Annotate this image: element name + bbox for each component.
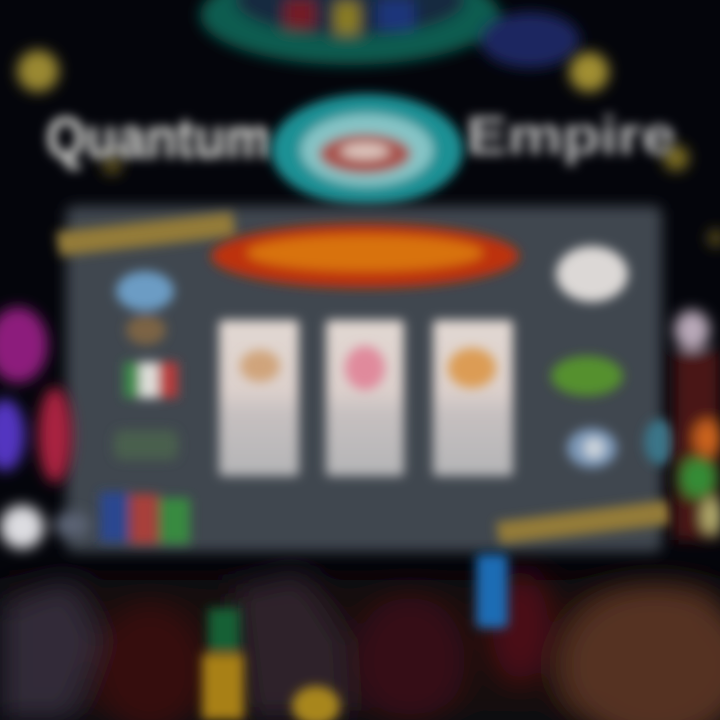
- badge: top right: [556, 246, 628, 302]
- left column icons: [114, 271, 178, 460]
- audience silhouettes at bottom: [0, 570, 720, 720]
- colour bars lower left: [100, 492, 190, 544]
- title: Empire: [466, 106, 676, 166]
- title emblem: [271, 94, 463, 206]
- right neon lights: [674, 310, 720, 540]
- title: Quantum: [46, 106, 271, 171]
- left neon lights: [0, 307, 90, 549]
- bottom coloured markers: [202, 554, 508, 720]
- ribbon: top left: [56, 212, 236, 256]
- title: [46, 106, 676, 171]
- slot machine panel: [56, 206, 676, 552]
- ribbon: bottom right: [496, 500, 672, 544]
- gold coins: [17, 50, 720, 247]
- top wheel emblem: [200, 0, 580, 68]
- reel 1: [219, 320, 299, 476]
- headline banner: [211, 224, 519, 288]
- reel 2: [326, 320, 404, 476]
- reel 3: [433, 320, 513, 476]
- right column icons: [551, 356, 676, 468]
